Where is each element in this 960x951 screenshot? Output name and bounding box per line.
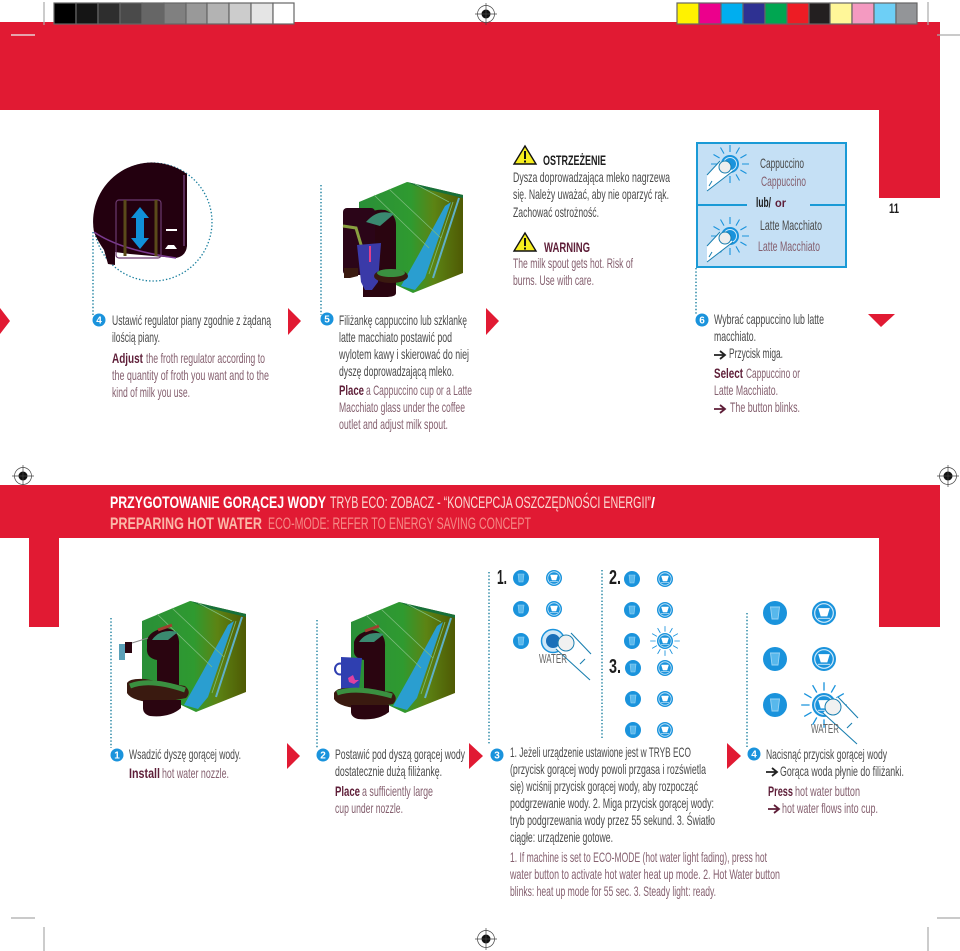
step 6: select drink: The button blinks. [730, 399, 800, 415]
step 5: place cup: outlet and adjust milk spout. [339, 416, 448, 432]
button panel 2 [609, 567, 680, 656]
arrow: step 4 to 5 [288, 308, 301, 335]
heading: PRZYGOTOWANIE GORĄCEJ WODY [110, 493, 326, 512]
step badge: 6 [699, 316, 705, 326]
panel: button selection: Latte Macchiato [760, 217, 822, 233]
page number: 11 [889, 200, 899, 216]
dotted leader panel 2 [601, 570, 603, 738]
dotted leader to step 6 [695, 268, 697, 315]
warning in English: The milk spout gets hot. Risk of [513, 255, 633, 271]
panel: button selection: lub/ [756, 194, 771, 210]
step 6: select drink: Cappuccino or [746, 365, 800, 381]
hot water step 3: eco mode: 1. If machine is set to ECO-MODE (hot water light fading), press hot [510, 849, 767, 865]
icon: up-down arrow [131, 207, 149, 249]
hot water step 4: press button: hot water button [795, 783, 860, 799]
step 6: select drink: Latte Macchiato. [714, 382, 778, 398]
panel: button selection: Cappuccino [761, 173, 806, 189]
step 5: place cup: latte macchiato postawić pod [339, 329, 452, 345]
step badge: 3 [494, 750, 500, 762]
hot water step 3: eco mode: podgrzewanie wody. 2. Miga przycisk gorącej wody: [510, 795, 714, 811]
step badge: 1 [114, 750, 120, 762]
button panel 3 [609, 656, 673, 738]
panel: button selection: Latte Macchiato [758, 238, 820, 254]
arrow: step 5 to 6 [486, 308, 499, 335]
hot water step 3: eco mode: 1. Jeżeli urządzenie ustawione jest w TRYB ECO [510, 744, 691, 760]
step 4: adjust froth [92, 312, 271, 400]
dotted leader to step 4 [92, 232, 94, 315]
step 5: place cup: dyszę doprowadzającą mleko. [339, 363, 454, 379]
warning in English: WARNING [544, 239, 590, 255]
warning in Polish: Dysza doprowadzająca mleko nagrzewa [513, 169, 670, 185]
panel: button selection: Cappuccino [760, 155, 804, 171]
dotted leader panel 1 [488, 572, 490, 745]
button panel 1: 1. [497, 567, 507, 589]
step 6: select drink: Przycisk miga. [729, 345, 783, 361]
hot water step 2: place cup: a sufficiently large [362, 783, 433, 799]
icon: pressed cappuccino button [707, 145, 749, 191]
hot water step 2: place cup: Place [335, 783, 360, 799]
hot water step 3: eco mode: ciągłe: urządzenie gotowe. [510, 829, 613, 845]
step badge [320, 312, 334, 326]
step 5: place cup: a Cappuccino cup or a Latte [366, 382, 472, 398]
step 4: adjust froth: the froth regulator according to [146, 350, 265, 366]
hot water step 4: press button: hot water flows into cup. [782, 800, 878, 816]
hot water step 3: eco mode: się) wciśnij przycisk gorącej wody, aby rozpocząć [510, 778, 698, 794]
dotted leader panel 4 [746, 613, 748, 748]
icon: warning triangle [514, 146, 536, 164]
step 5: place cup: Place [339, 382, 364, 398]
hot water step 2: place cup: cup under nozzle. [335, 800, 403, 816]
button panel 3: 3. [609, 656, 621, 678]
nozzle [119, 638, 148, 660]
hot water step 4: press button: Press [768, 783, 793, 799]
step badge: 4 [751, 750, 757, 760]
step 5: place cup [320, 312, 472, 432]
heading: / [651, 495, 656, 512]
step 6: select drink [696, 311, 824, 415]
step badge: 4 [96, 316, 102, 326]
warning in Polish: się. Należy uważać, aby nie oparzyć rąk. [513, 186, 669, 202]
warning in Polish: OSTRZEŻENIE [543, 152, 606, 168]
icon: blue mug [335, 657, 362, 690]
dotted leader to hot water step 2 [316, 620, 318, 748]
warning in English [513, 233, 633, 288]
hot water step 2: place cup: Postawić pod dyszą gorącej wody [335, 746, 465, 762]
step 6: select drink: Wybrać cappuccino lub latte [714, 311, 824, 327]
hot water step 3: eco mode: blinks: heat up mode for 55 sec. 3. Steady light: ready. [510, 883, 716, 899]
hot water step 4: press button: Nacisnąć przycisk gorącej wody [766, 746, 887, 762]
hot water step 3: eco mode [490, 744, 780, 899]
dotted leader to step 5 [320, 185, 322, 315]
step 5: place cup: Filiżankę cappuccino lub szklankę [339, 312, 467, 328]
hot water step 1: install nozzle [110, 746, 241, 781]
hot water step 3: eco mode: (przycisk gorącej wody powoli przgasa i rozświetla [510, 761, 706, 777]
step 6: select drink: Select [714, 365, 743, 381]
step 4: adjust froth: Adjust [112, 350, 143, 366]
button panel 4 [763, 601, 858, 744]
button panel 1 [497, 567, 591, 680]
icon: warning triangle [514, 233, 536, 251]
step badge [748, 748, 760, 760]
step 4: adjust froth: Ustawić regulator piany zgodnie z żądaną [112, 312, 271, 328]
illustration: machine with mug [334, 602, 455, 719]
button panel 1: WATER [539, 651, 567, 666]
illustration: machine with hot water nozzle [119, 601, 246, 716]
hot water step 1: install nozzle: hot water nozzle. [162, 765, 229, 781]
step badge [490, 748, 504, 762]
top red band [0, 22, 940, 110]
arrow: continue down [868, 314, 895, 327]
heading: PREPARING HOT WATER [110, 514, 262, 533]
arrow: step 3 to 4 [727, 743, 741, 769]
icon: pressed latte button [707, 217, 749, 262]
hot water step 2: place cup: dostatecznie dużą filiżankę. [335, 763, 442, 779]
step 6: select drink: macchiato. [714, 328, 756, 344]
process colour bar [677, 3, 917, 24]
step 4: adjust froth: kind of milk you use. [112, 384, 190, 400]
arrow: step 1 to 2 [287, 743, 300, 769]
hot water step 4: press button [748, 746, 904, 816]
hot water step 3: eco mode: water button to activate hot water heat up mode. 2. Hot Water button [509, 866, 780, 882]
heading: ECO-MODE: REFER TO ENERGY SAVING CONCEPT [268, 514, 531, 533]
warning in English: burns. Use with care. [513, 272, 594, 288]
dotted leader to hot water step 1 [110, 618, 112, 748]
hot water step 2: place cup [316, 746, 465, 816]
step 5: place cup: wylotem kawy i skierować do niej [338, 346, 469, 362]
heading: TRYB ECO: ZOBACZ - “KONCEPCJA OSZCZĘDNOŚCI ENERGII” [330, 493, 651, 512]
step badge [316, 748, 330, 762]
icon: pressed water button [542, 630, 591, 680]
illustration: coffee machine with cup [343, 182, 463, 297]
button panel 4: WATER [811, 721, 839, 736]
arrow: left edge [0, 308, 10, 334]
button panel 2: 2. [609, 567, 621, 589]
red page tab [879, 110, 940, 198]
panel: button selection: or [775, 196, 786, 210]
section band: hot water [0, 485, 940, 627]
arrow: step 2 to 3 [469, 743, 483, 769]
hot water step 1: install nozzle: Install [129, 765, 160, 781]
illustration: froth regulator close-up [93, 163, 212, 281]
hot water step 3: eco mode: tryb podgrzewania wody przez 55 sekund. 3. Światło [510, 811, 715, 828]
step badge: 2 [320, 750, 326, 762]
step badge: 5 [324, 314, 330, 326]
heading [110, 493, 656, 533]
step 4: adjust froth: the quantity of froth you want and to the [112, 367, 269, 383]
grayscale colour bar [54, 3, 294, 24]
warning in Polish: Zachować ostrożność. [513, 204, 599, 220]
step 5: place cup: Macchiato glass under the coffee [339, 399, 465, 415]
warning in Polish [513, 146, 670, 220]
hot water step 1: install nozzle: Wsadzić dyszę gorącej wody. [129, 746, 241, 762]
step 4: adjust froth: ilością piany. [112, 329, 160, 345]
step badge [92, 314, 106, 326]
icon: blinking water button [650, 626, 680, 656]
icon: pressed water button with rays [801, 682, 858, 744]
panel: button selection [697, 143, 846, 267]
